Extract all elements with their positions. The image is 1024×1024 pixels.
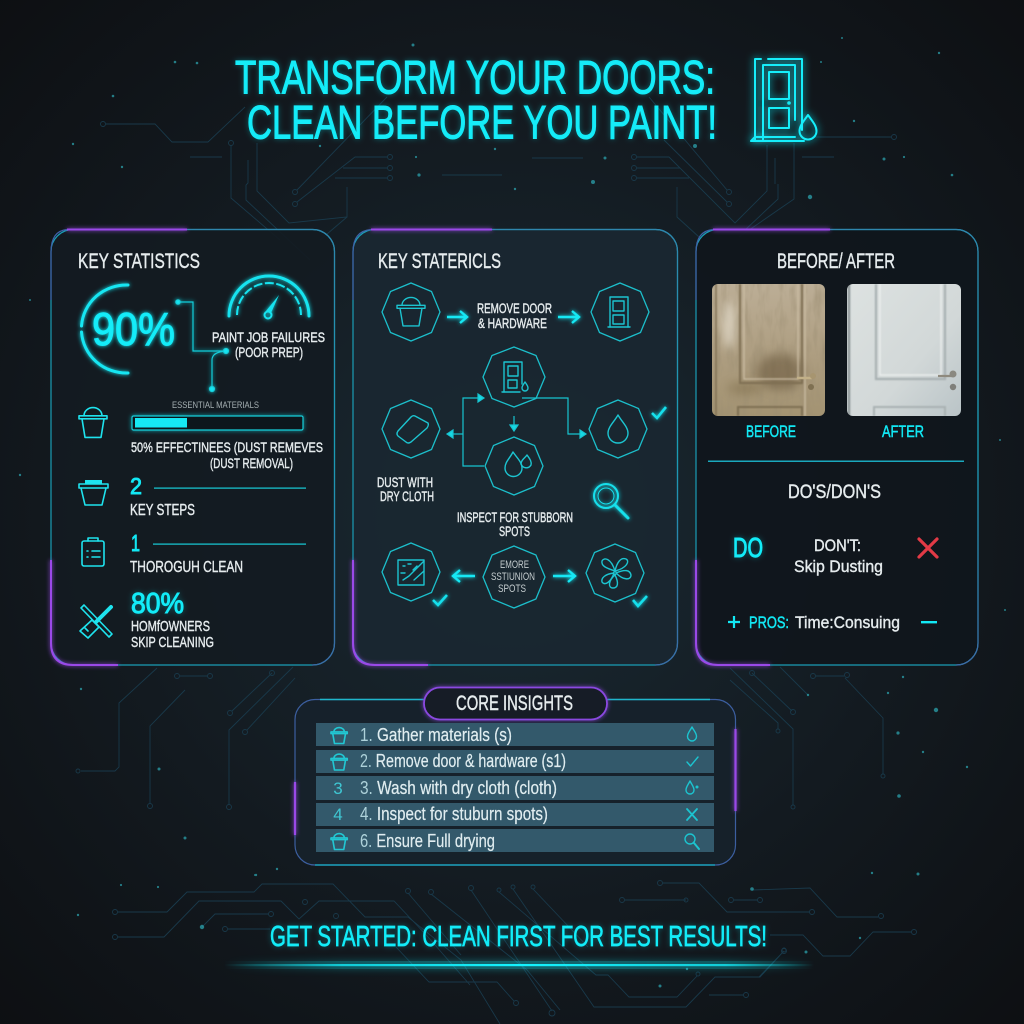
label: essential materials: ESSENTIAL MATERIALS xyxy=(172,400,259,411)
text: dust with dry cloth: DUST WITH xyxy=(377,475,433,490)
stat label: paint job failures: PAINT JOB FAILURES xyxy=(212,330,325,345)
heading: BEFORE/ AFTER xyxy=(777,250,895,273)
text: inspect xyxy=(457,510,573,539)
connectors xyxy=(447,394,586,466)
step: ensure spots: SSTIUNION xyxy=(491,571,535,583)
title xyxy=(235,50,717,148)
row 2 xyxy=(316,750,714,773)
text: effectiveness: 50% EFFECTINEES (DUST REMEVES xyxy=(131,439,323,455)
stat: 1 thorough clean: THOROGUH CLEAN xyxy=(130,559,243,576)
text: dust with dry cloth xyxy=(377,475,434,504)
heading pill: CORE INSIGHTS xyxy=(456,692,573,715)
stat: 90% ring: 90% xyxy=(92,303,175,355)
panel: before and after xyxy=(696,230,978,665)
text: effectiveness: (DUST REMOVAL) xyxy=(210,455,293,471)
text: pros: PROS: xyxy=(749,613,789,632)
photo: clean door xyxy=(847,284,961,416)
panel: core insights xyxy=(295,688,736,865)
row 3: 3. Wash with dry cloth (cloth) xyxy=(360,778,557,798)
text: dont skip dusting xyxy=(794,536,883,576)
stat: 90% ring xyxy=(82,285,175,373)
stat: 80% homeowners: HOMfOWNERS xyxy=(131,618,210,635)
row 1 xyxy=(316,723,714,746)
label: before: BEFORE xyxy=(746,422,796,441)
text: inspect: INSPECT FOR STUBBORN xyxy=(457,510,573,525)
stat: 80% homeowners: 80% xyxy=(131,588,184,620)
row 3: 3 xyxy=(333,779,343,798)
icon: minus xyxy=(921,621,937,623)
check xyxy=(433,595,447,605)
check xyxy=(633,596,647,606)
icon: crossed tools xyxy=(80,605,112,638)
panel: process steps xyxy=(353,229,678,665)
icon: bucket xyxy=(79,408,107,437)
label: do: DO xyxy=(733,532,763,563)
progress bar xyxy=(132,416,303,430)
arrow xyxy=(447,311,467,323)
step: drop xyxy=(589,400,647,458)
stat: 80% homeowners: SKIP CLEANING xyxy=(131,634,214,651)
step: ensure spots: EMORE xyxy=(500,559,529,571)
row 4 xyxy=(316,803,714,826)
text: dont skip dusting: Skip Dusting xyxy=(794,557,883,576)
icon: plus xyxy=(728,616,740,628)
title: TRANSFORM YOUR DOORS: xyxy=(235,50,715,104)
stat: 2 key steps: KEY STEPS xyxy=(130,502,195,519)
footer call to action: GET STARTED: CLEAN FIRST FOR BEST RESULTS! xyxy=(270,921,767,953)
row 2: 2. Remove door & hardware (s1) xyxy=(360,751,566,771)
text: effectiveness xyxy=(131,439,323,471)
row 1: 1. Gather materials (s) xyxy=(360,725,512,745)
icon: gauge xyxy=(229,276,309,318)
step: bucket xyxy=(382,283,440,341)
stat: 2 key steps: 2 xyxy=(130,473,142,499)
connector lines xyxy=(176,300,228,392)
stat label: paint job failures: (POOR PREP) xyxy=(235,345,303,360)
arrow xyxy=(453,570,475,582)
panel: key statistics xyxy=(51,229,335,665)
icon: red cross xyxy=(919,539,937,557)
heading: KEY STATISTICS xyxy=(78,250,200,273)
arrow xyxy=(553,570,575,582)
footer glow line xyxy=(224,961,814,969)
stat: 2 key steps xyxy=(130,473,306,519)
photo: dirty door xyxy=(712,284,825,416)
icon: bucket with lid xyxy=(79,480,108,505)
heading: KEY STATERICLS xyxy=(378,250,501,273)
text: remove door xyxy=(477,301,552,331)
icon: door with water drop xyxy=(751,59,816,141)
step: ensure spots: SPOTS xyxy=(498,583,526,595)
text: inspect: SPOTS xyxy=(499,524,530,539)
text: pros xyxy=(749,613,900,632)
step: cloth xyxy=(382,400,440,458)
stat: 80% homeowners xyxy=(131,588,214,651)
arrow xyxy=(558,311,579,323)
step: wash drops xyxy=(485,437,543,495)
step: door xyxy=(591,283,649,341)
icon: clipboard xyxy=(82,538,104,566)
text: pros: Time:Consuing xyxy=(795,613,900,632)
step: ensure spots xyxy=(483,546,545,608)
stat label: paint job failures xyxy=(212,330,325,360)
circuit traces background xyxy=(76,97,916,1024)
icon: magnifier xyxy=(594,484,628,518)
step: map xyxy=(382,543,440,601)
row 4: 4 xyxy=(333,805,343,824)
stat: 1 thorough clean xyxy=(130,530,306,576)
row 5: 6. Ensure Full drying xyxy=(360,831,495,851)
label: after: AFTER xyxy=(882,422,924,441)
heading pill xyxy=(424,688,607,720)
row 4: 4. Inspect for stuburn spots) xyxy=(360,804,548,824)
title: CLEAN BEFORE YOU PAINT! xyxy=(247,96,717,148)
step: door with drop xyxy=(483,347,545,407)
stat: 1 thorough clean: 1 xyxy=(131,530,140,556)
text: dont skip dusting: DON'T: xyxy=(814,536,861,555)
row 3 xyxy=(316,776,714,800)
heading: dos and donts: DO'S/DON'S xyxy=(788,482,881,503)
text: remove door: & HARDWARE xyxy=(478,316,547,331)
row 5 xyxy=(316,829,714,852)
step: fan xyxy=(586,544,644,602)
check xyxy=(652,407,666,418)
text: remove door: REMOVE DOOR xyxy=(477,301,552,316)
text: dust with dry cloth: DRY CLOTH xyxy=(380,489,434,504)
